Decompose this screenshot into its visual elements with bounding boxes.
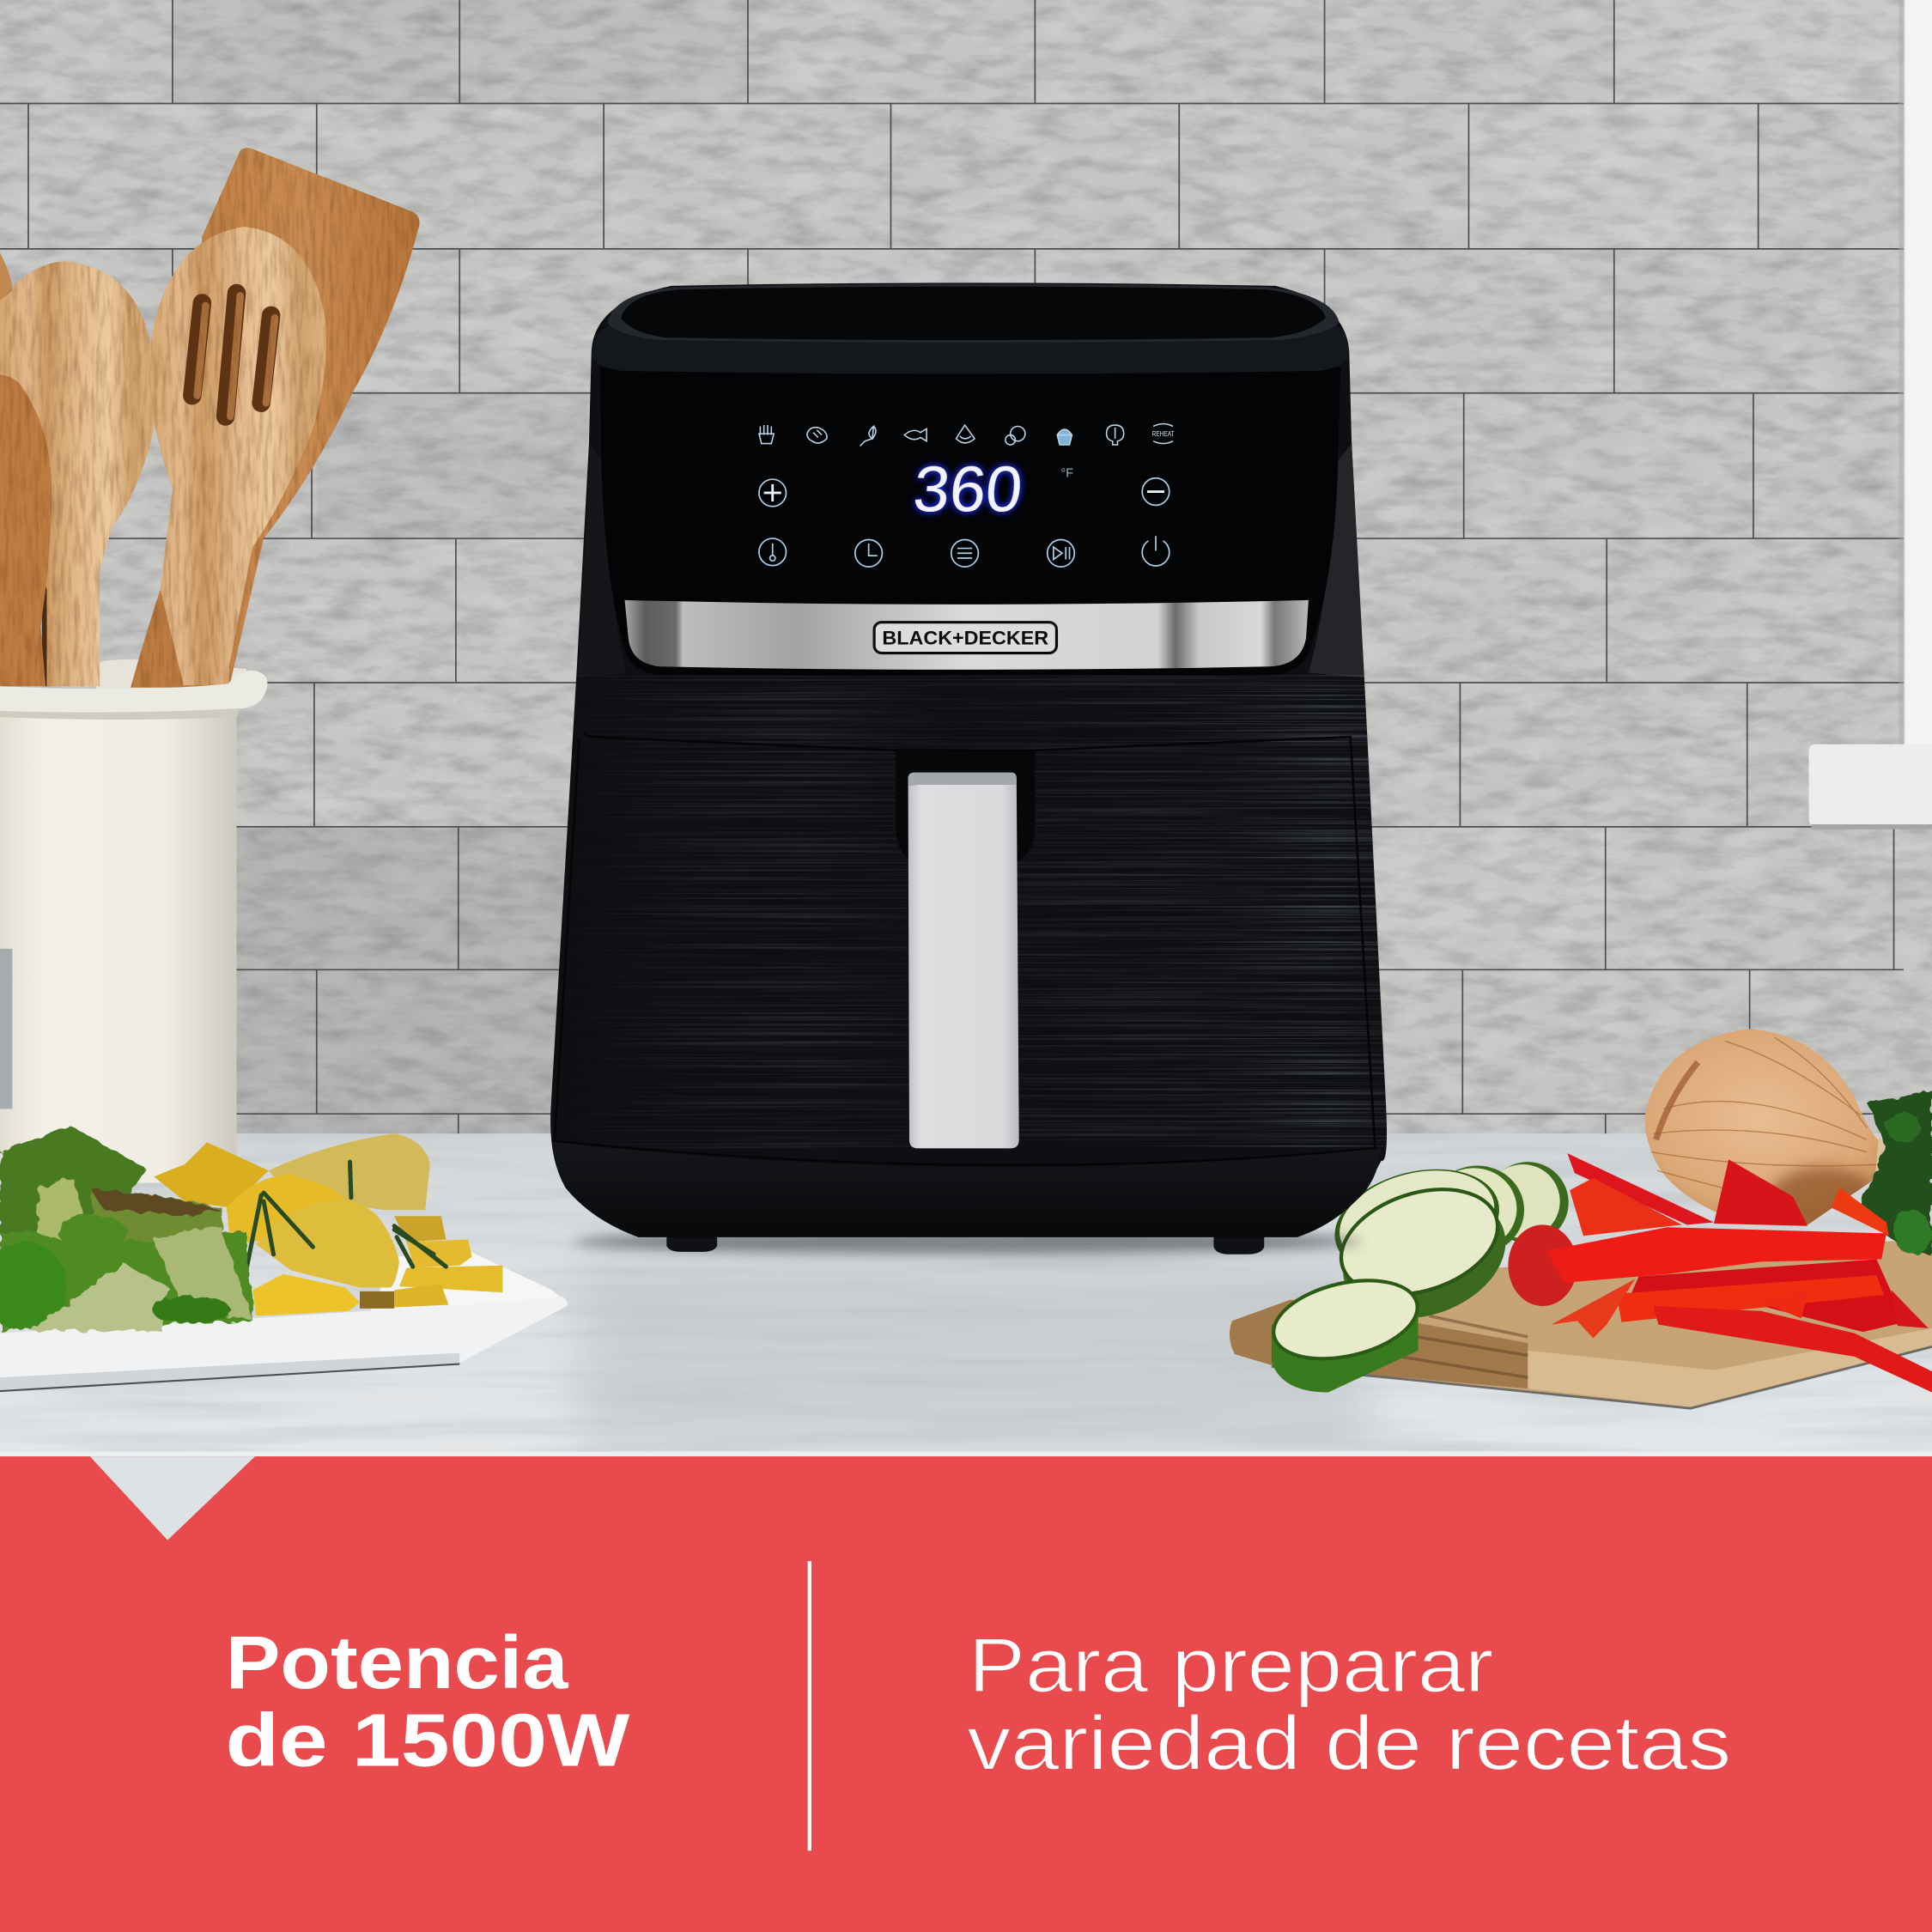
left heading: Potencia bbox=[226, 1620, 569, 1704]
fryer body bbox=[550, 283, 1387, 1237]
icon: muffin bbox=[1057, 429, 1072, 445]
logo badge: BLACK+DECKER bbox=[882, 627, 1048, 648]
control panel glass bbox=[600, 368, 1340, 675]
zucchini slices bbox=[1264, 1153, 1569, 1392]
utensil: flat spatula bbox=[131, 148, 420, 688]
parsley bbox=[1853, 1091, 1932, 1257]
right description: Para preparar bbox=[969, 1622, 1493, 1708]
counter top bbox=[0, 1133, 1932, 1456]
button: play pause bbox=[1048, 540, 1074, 567]
button: menu bbox=[951, 540, 978, 567]
plate of vegetables bbox=[0, 1125, 568, 1391]
left heading: de 1500W bbox=[226, 1698, 630, 1782]
brushed finish bbox=[607, 675, 1388, 1148]
right description bbox=[967, 1622, 1731, 1786]
button: plus bbox=[759, 479, 786, 507]
lid top bbox=[621, 287, 1326, 340]
white plate bbox=[0, 1250, 568, 1391]
handle recess bbox=[896, 750, 1035, 861]
icon: reheat: REHEAT bbox=[1152, 430, 1175, 438]
drawer base bbox=[553, 1142, 1382, 1237]
rosemary sprigs bbox=[244, 1162, 446, 1281]
icon: fries bbox=[759, 425, 774, 444]
touch buttons bbox=[759, 478, 1170, 567]
wooden board bbox=[1230, 1238, 1932, 1408]
window frame and sill bbox=[1809, 0, 1932, 829]
icon: reheat bbox=[1152, 424, 1175, 444]
stainless steel band bbox=[625, 600, 1309, 670]
preset food icons bbox=[759, 424, 1175, 446]
right description: variedad de recetas bbox=[967, 1700, 1731, 1786]
red pepper strips bbox=[1508, 1153, 1932, 1392]
air fryer bbox=[550, 283, 1388, 1255]
utensil: front spoon bbox=[0, 374, 52, 686]
wooden utensils bbox=[0, 142, 425, 690]
icon: fish bbox=[904, 428, 927, 441]
button: minus bbox=[1142, 478, 1170, 505]
lid rim bbox=[592, 323, 1349, 374]
lid recess bbox=[607, 284, 1340, 343]
utensil: slotted spoon bbox=[149, 227, 326, 685]
button: clock bbox=[855, 540, 882, 567]
button: temperature bbox=[759, 538, 786, 566]
panel: kitchen photo scene bbox=[0, 0, 1932, 1456]
icon: watermelon bbox=[957, 425, 975, 443]
crock back rim bbox=[96, 659, 246, 690]
squash pieces bbox=[154, 1133, 502, 1316]
tile wall background bbox=[0, 0, 1932, 1139]
logo badge bbox=[874, 623, 1056, 653]
pointer notch bbox=[90, 1456, 255, 1540]
red caption band bbox=[0, 1456, 1932, 1932]
cutting board with vegetables bbox=[1230, 1029, 1932, 1408]
left heading bbox=[226, 1620, 630, 1782]
icon: drumstick bbox=[860, 426, 876, 446]
gap shadow behind handles bbox=[42, 579, 49, 686]
utensil: left spoon bbox=[0, 261, 156, 686]
onion bbox=[1645, 1029, 1886, 1224]
wood grain texture bbox=[0, 142, 425, 690]
icon: steak bbox=[807, 428, 827, 443]
temperature display: 360 bbox=[910, 453, 1025, 525]
floor shadow bbox=[573, 1230, 1362, 1255]
utensil: back stick bbox=[0, 252, 12, 301]
fahrenheit unit: °F bbox=[1060, 466, 1073, 480]
crock utensil holder bbox=[0, 671, 267, 1183]
icon: citrus bbox=[1005, 426, 1025, 445]
drawer seam bbox=[555, 733, 1375, 1165]
button: power bbox=[1142, 536, 1170, 566]
silver handle bbox=[908, 773, 1019, 1148]
body side highlight bbox=[1309, 444, 1364, 677]
icon: broccoli bbox=[1107, 425, 1124, 445]
feet bbox=[666, 1232, 1264, 1255]
broccoli bbox=[0, 1125, 252, 1331]
divider bbox=[808, 1561, 811, 1850]
